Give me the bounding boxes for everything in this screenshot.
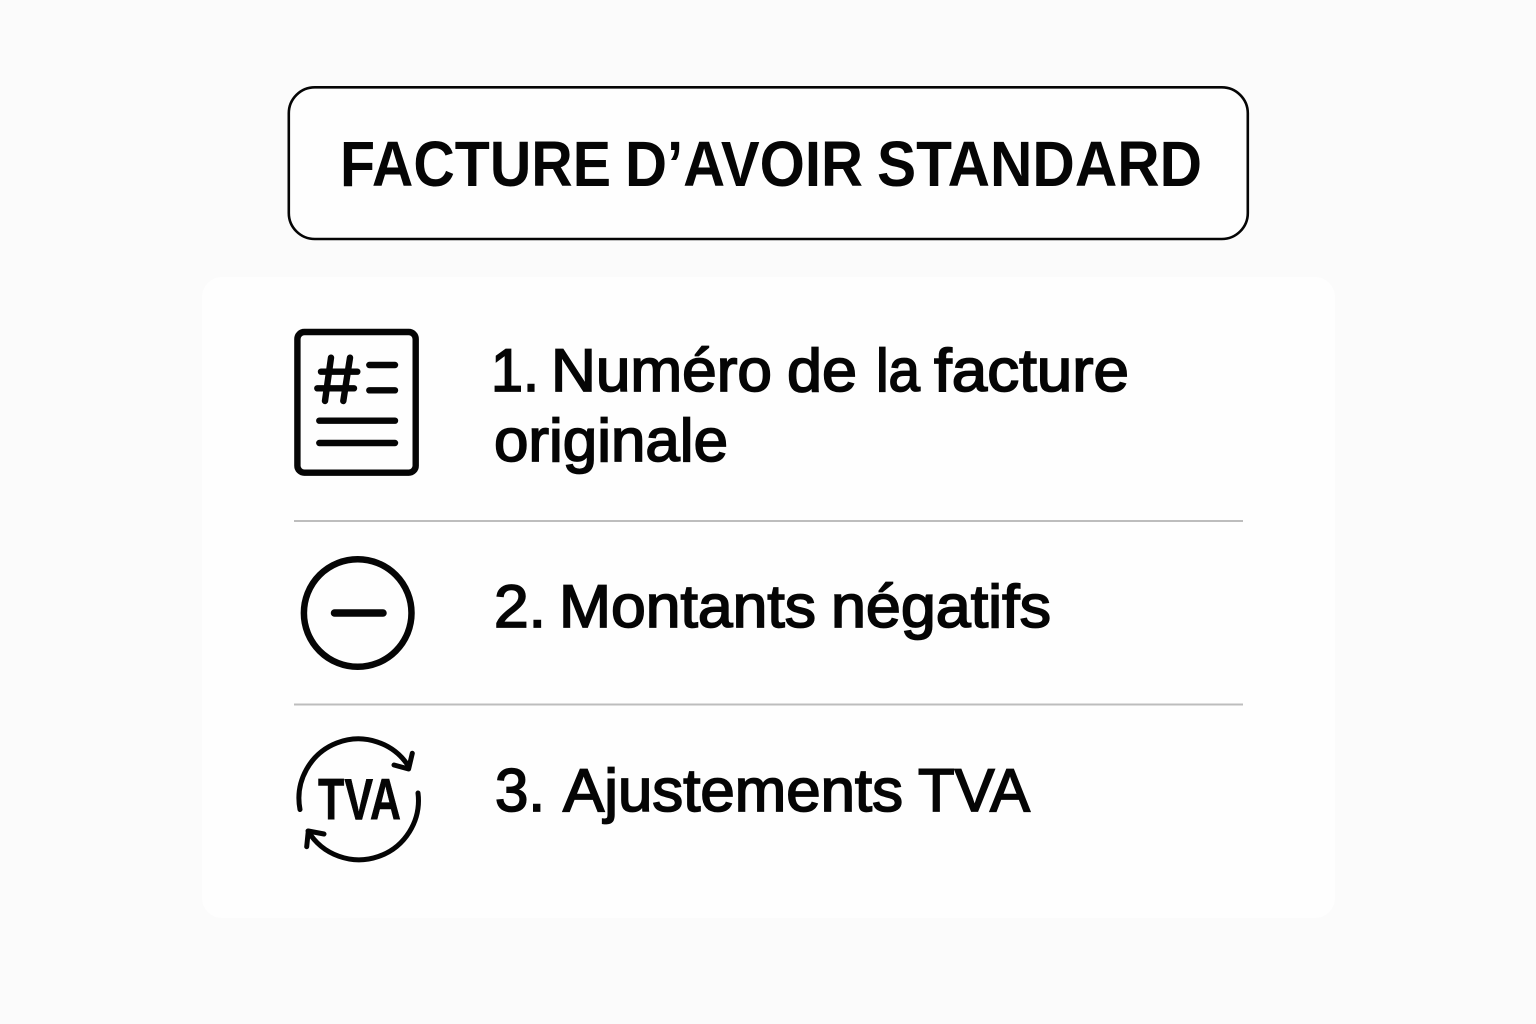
icon: invoice number document bbox=[297, 332, 416, 473]
text: item 3: TVA bbox=[918, 757, 1030, 824]
text: item 2: 2. bbox=[494, 573, 546, 640]
title: STANDARD bbox=[877, 128, 1202, 200]
icon: minus circle bbox=[304, 559, 412, 667]
text: item 3: Ajustements bbox=[563, 757, 903, 824]
text: item 2 bbox=[494, 573, 1051, 640]
icon: VAT adjustment arrows bbox=[299, 739, 418, 860]
title: D’AVOIR bbox=[625, 128, 863, 200]
title box bbox=[289, 87, 1248, 239]
panel: checklist card bbox=[202, 277, 1335, 918]
text: item 1: la bbox=[876, 337, 921, 404]
text: item 2: Montants bbox=[559, 573, 816, 640]
icon: VAT adjustment arrows: TVA bbox=[318, 767, 401, 832]
text: item 1 bbox=[491, 337, 1129, 474]
text: item 3 bbox=[495, 757, 1030, 824]
text: item 1: facture bbox=[934, 337, 1129, 404]
title: FACTURE bbox=[340, 128, 611, 200]
text: item 3: 3. bbox=[495, 757, 545, 824]
text: item 1: de bbox=[787, 337, 857, 404]
title bbox=[340, 128, 1202, 200]
text: item 1: 1. bbox=[491, 337, 539, 404]
text: item 1: Numéro bbox=[551, 337, 772, 404]
text: item 1: originale bbox=[494, 407, 728, 474]
text: item 2: négatifs bbox=[831, 573, 1051, 640]
